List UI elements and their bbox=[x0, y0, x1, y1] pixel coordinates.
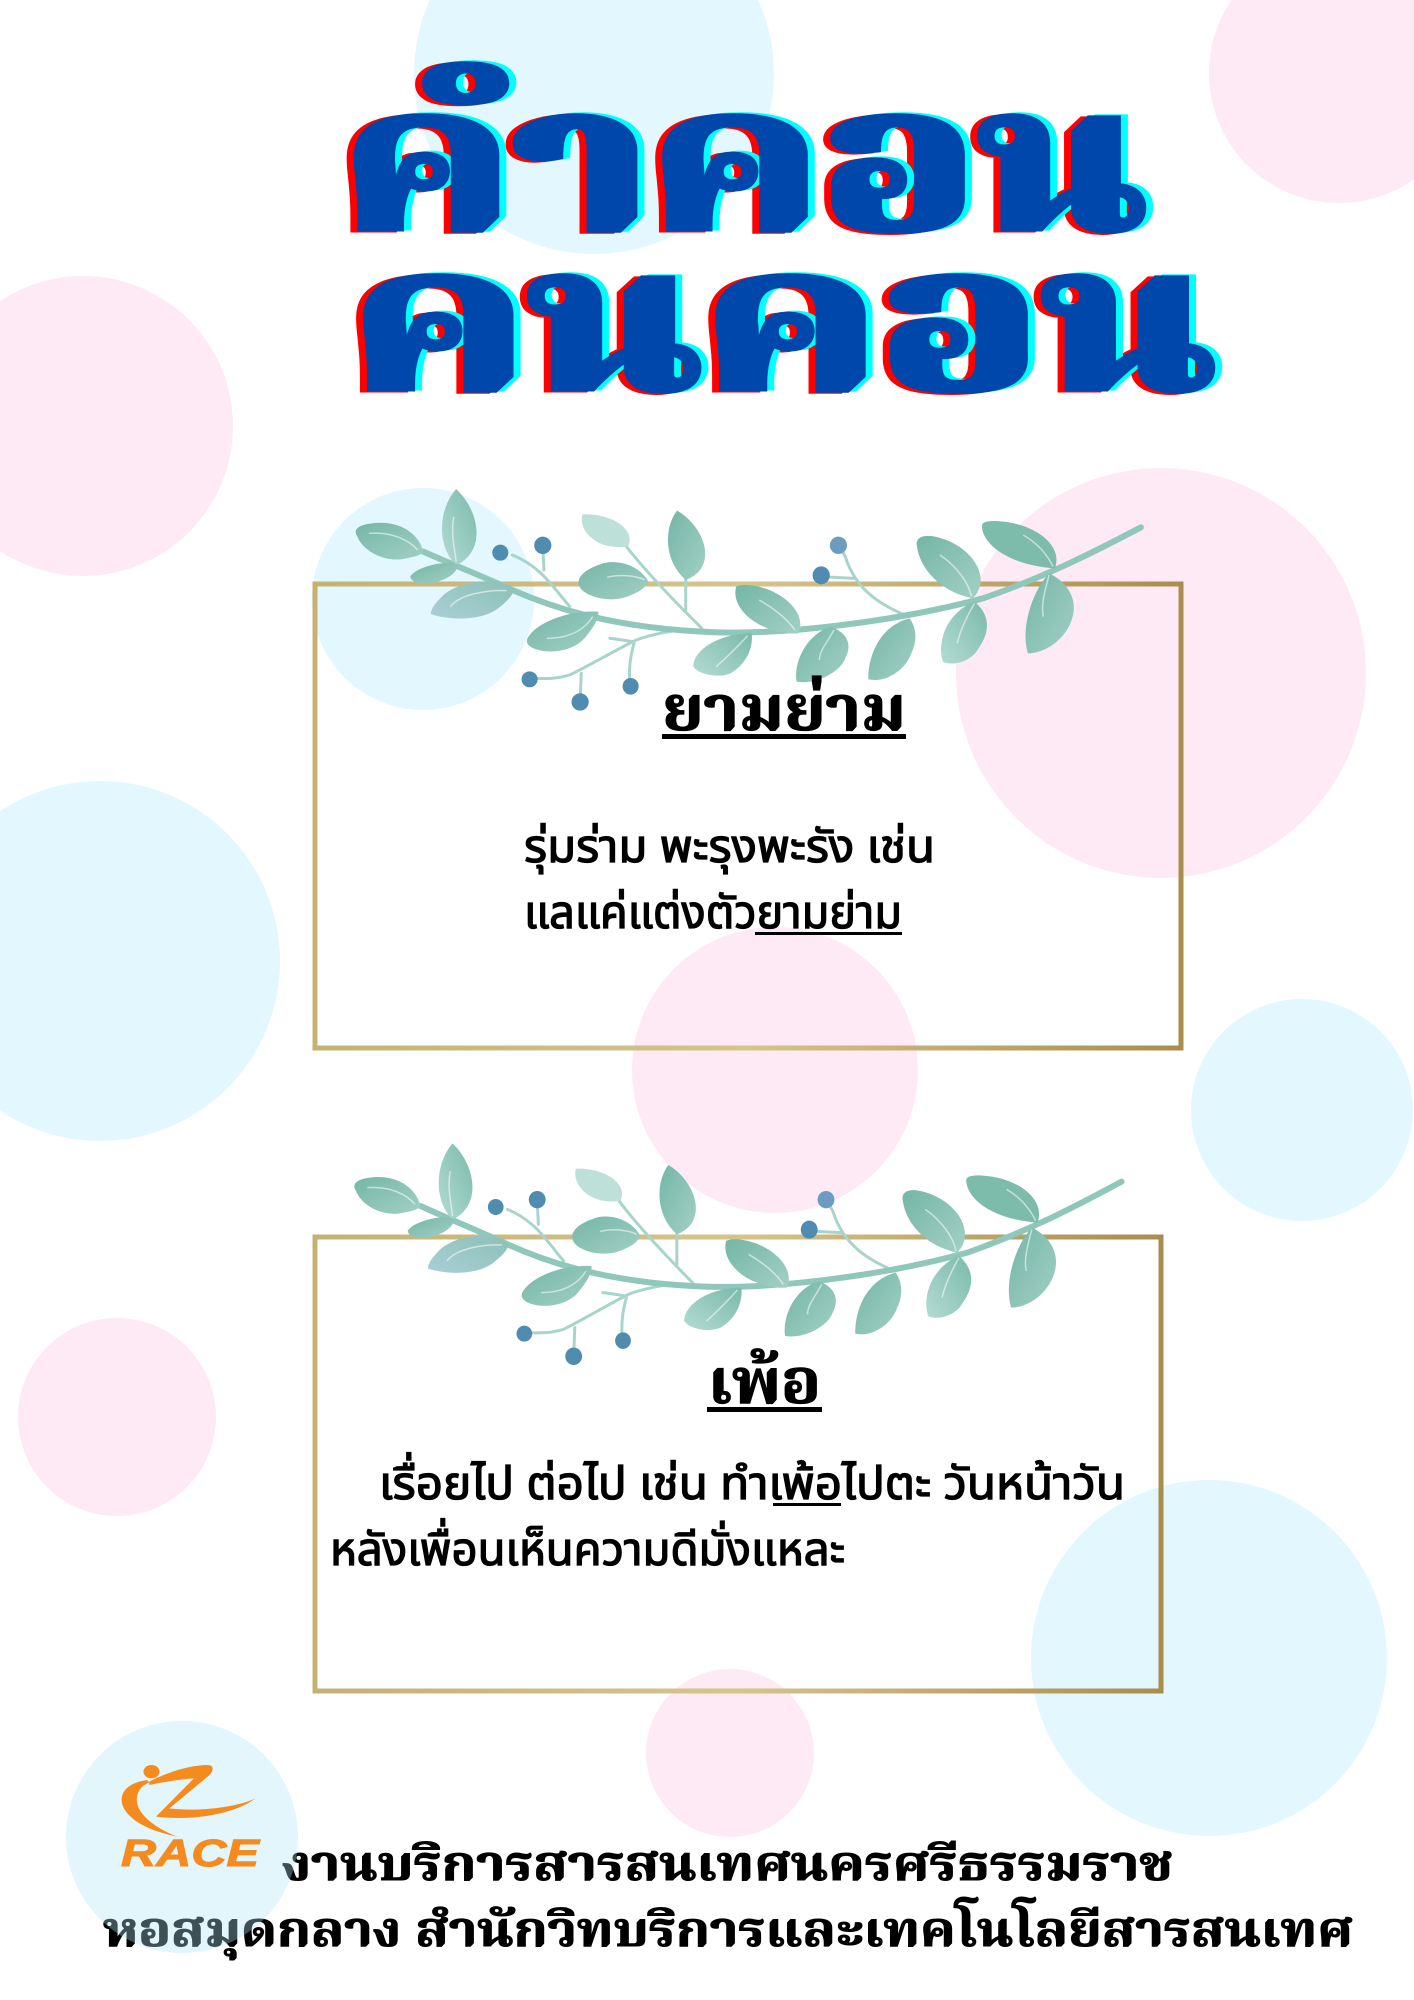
title: คำคอน bbox=[334, 14, 1140, 341]
icon: leaf garland bottom bbox=[354, 1143, 1122, 1365]
title: คนคอน bbox=[343, 174, 1209, 501]
text block: phoe definition: หลังเพื่อนเห็นความดีมั่งแหละ bbox=[330, 1516, 845, 1586]
logo circle overlay bbox=[66, 1721, 298, 1953]
footer text bbox=[103, 1829, 1353, 1972]
title: คนคอน bbox=[350, 173, 1216, 500]
title bbox=[334, 12, 1223, 501]
footer text: งานบริการสารสนเทศนครศรีธรรมราช bbox=[282, 1829, 1173, 1906]
text block: yam yam definition bbox=[524, 813, 935, 949]
panel: phoe frame bbox=[315, 1237, 1161, 1691]
icon: leaf garland top bbox=[356, 489, 1141, 711]
text block: yam yam definition: แลแค่แต่งตัวยามย่าม bbox=[524, 879, 902, 949]
panel: yam yam frame bbox=[315, 584, 1181, 1048]
logo: RACE: RACE bbox=[121, 1833, 261, 1875]
title: คำคอน bbox=[341, 13, 1147, 340]
title: คนคอน bbox=[357, 172, 1223, 499]
heading: yam yam: ยามย่าม bbox=[662, 665, 906, 764]
text block: phoe definition: เรื่อยไป ต่อไป เช่น ทำเพ้อไปตะ วันหน้าวัน bbox=[379, 1450, 1125, 1520]
title: คำคอน bbox=[348, 12, 1154, 339]
heading: phoe: เพ้อ bbox=[708, 1338, 821, 1437]
footer text: หอสมุดกลาง สำนักวิทบริการและเทคโนโลยีสารสนเทศ bbox=[103, 1895, 1353, 1972]
text block: yam yam definition: รุ่มร่าม พะรุงพะรัง เช่น bbox=[524, 813, 935, 883]
logo: RACE bbox=[121, 1765, 261, 1875]
text block: phoe definition bbox=[330, 1450, 1125, 1586]
